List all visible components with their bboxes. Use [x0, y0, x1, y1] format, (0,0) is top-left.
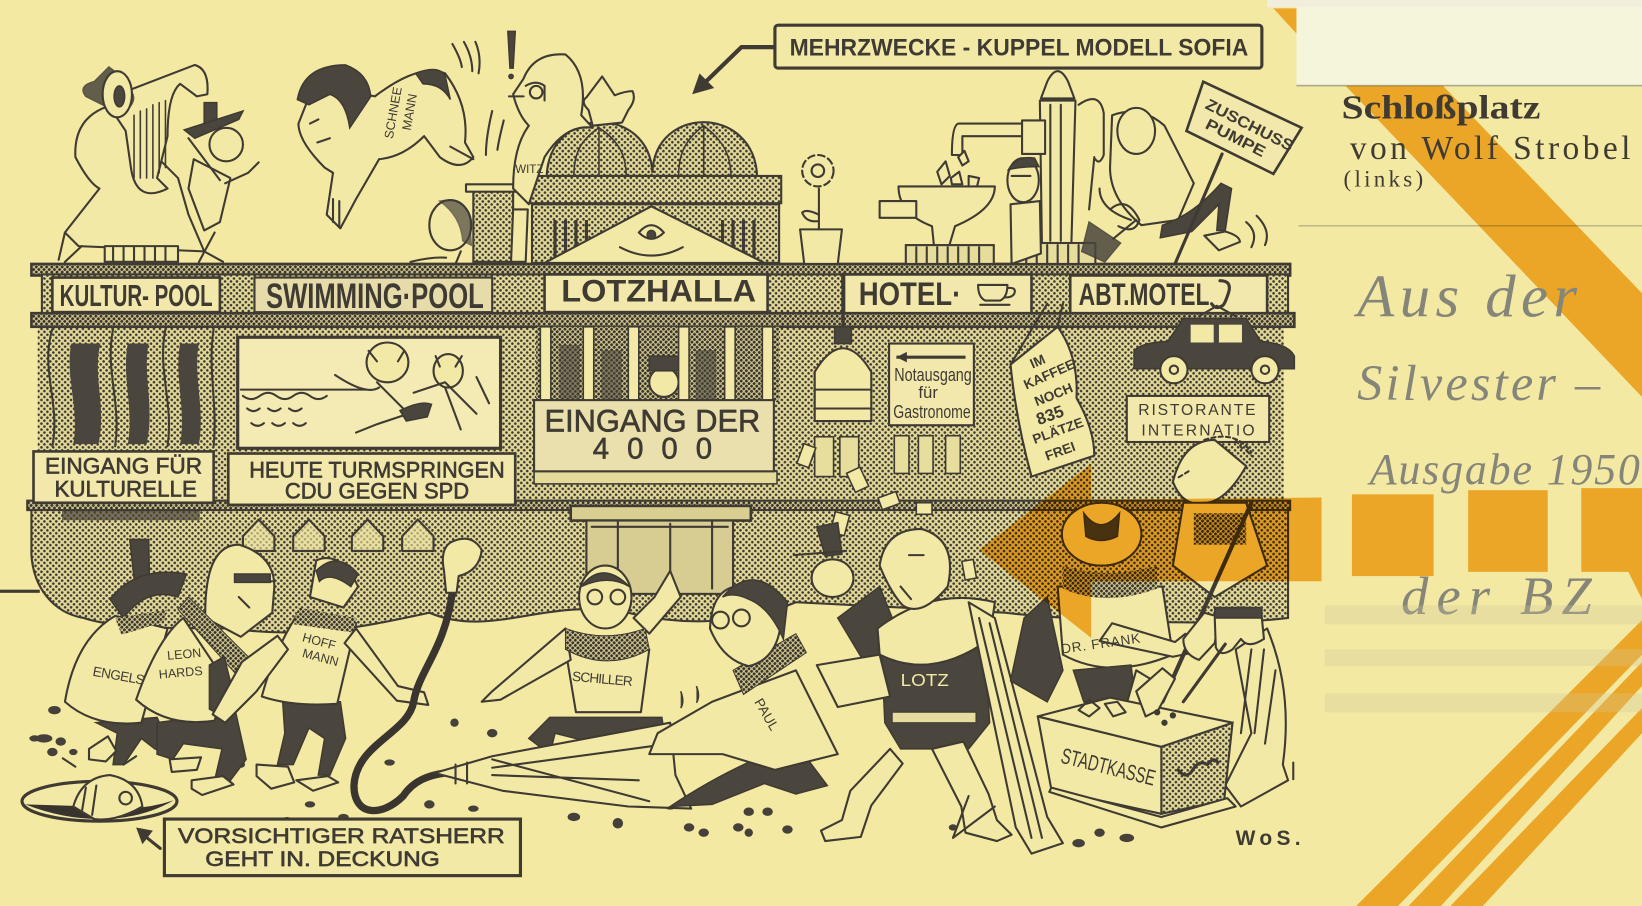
sign: Zuschuss-Pumpe: PUMPE: [1202, 116, 1268, 161]
figure: Dr. Frank: DR. FRANK: [1060, 631, 1141, 657]
swimmer "Schneemann" diving: SCHNEE: [382, 86, 405, 140]
orange corner triangle: [1273, 8, 1296, 34]
sign: Eingang für Kulturelle: [34, 451, 214, 503]
sign: Ristorante Internatio: [1127, 396, 1269, 442]
sign: Lotzhalla: LOTZHALLA: [561, 274, 756, 309]
hose: [354, 539, 482, 811]
sign: Eingang der 4000: [534, 400, 774, 471]
figure: Paul: [649, 580, 838, 770]
car on hook: [1133, 306, 1294, 383]
figure: Hoffmann: MANN: [301, 646, 340, 669]
sign: Eingang der 4000: EINGANG DER: [545, 404, 760, 439]
figure: Dr. Frank: [1011, 503, 1194, 712]
scattered coins: [29, 706, 1134, 847]
figure: Engels: [65, 539, 186, 765]
man with glasses behind pump: [1007, 158, 1041, 264]
domes: [547, 122, 757, 176]
newspaper heading: Schloßplatz: [1341, 89, 1630, 191]
domed roof temple: [530, 122, 781, 263]
sign: Vorsichtiger Ratsherr: VORSICHTIGER RATSHERR: [178, 825, 505, 848]
orange diagonal band: [1346, 86, 1642, 397]
figure: Leonhards: LEON: [167, 646, 202, 663]
handwritten note: Ausgabe 1950: [1367, 445, 1640, 494]
banner: Im Kaffee noch 835 Plätze frei: IM: [1028, 352, 1048, 371]
handwritten note: Silvester –: [1357, 355, 1601, 411]
orange stripes bottom right: [1356, 620, 1642, 906]
sign: Eingang für Kulturelle: KULTURELLE: [54, 476, 197, 501]
chimney with girl: [410, 184, 518, 264]
swimmer "Schneemann" diving: [297, 65, 473, 228]
arrow to manhole: [136, 827, 160, 848]
falling papers: [797, 444, 976, 580]
banner: Im Kaffee noch 835 Plätze frei: 835: [1034, 402, 1066, 429]
arrow to dome: [692, 47, 773, 94]
banner: Im Kaffee noch 835 Plätze frei: PLÄTZE: [1031, 415, 1085, 447]
colonnade with people: [536, 327, 779, 402]
banner: Im Kaffee noch 835 Plätze frei: KAFFEE: [1021, 357, 1077, 392]
sign: Notausgang für Gastronome: [889, 344, 974, 425]
exclamation and motion marks: [452, 31, 515, 155]
water pump: [952, 71, 1104, 264]
sign: Ristorante Internatio: INTERNATIO: [1141, 423, 1255, 440]
base wall: [31, 507, 1288, 633]
sign: Eingang der 4000: 4000: [593, 433, 712, 466]
roof cornice: [27, 264, 1294, 510]
sign: Zuschuss-Pumpe: [1175, 82, 1302, 264]
sign: Mehrzwecke-Kuppel Modell Sofia: MEHRZWECKE - KUPPEL MODELL SOFIA: [790, 35, 1248, 62]
newspaper heading: Schloßplatz: von Wolf Strobel: [1350, 130, 1630, 167]
swimming pool poster: [238, 337, 501, 448]
swimmer "Schneemann" diving: MANN: [400, 93, 420, 131]
sign: Notausgang für Gastronome: für: [918, 383, 938, 402]
figure: Hoffmann: [213, 558, 428, 791]
figure: Lotz: [817, 529, 1012, 841]
manhole with cautious councillor: [22, 756, 177, 821]
man with kettle behind the dome: WITZ: [515, 164, 543, 176]
sign: Kultur-Pool: KULTUR- POOL: [60, 280, 213, 313]
figure kneeling with long nose: [1215, 607, 1293, 806]
chest: Stadtkasse: [1038, 644, 1236, 827]
sign: Abt. Motel: ABT.MOTEL: [1079, 277, 1210, 312]
sign: Heute Turmspringen: HEUTE TURMSPRINGEN: [249, 458, 505, 483]
figure: Paul: PAUL: [751, 696, 782, 734]
figure: Leonhards: HARDS: [158, 664, 203, 682]
figure: Schiller: SCHILLER: [572, 669, 633, 689]
balustrade: [530, 176, 781, 203]
umbrella on the ground: [435, 723, 827, 809]
banner: Im Kaffee noch 835 Plätze frei: NOCH: [1032, 380, 1075, 409]
sign: Eingang für Kulturelle: EINGANG FÜR: [45, 453, 202, 478]
sign: Vorsichtiger Ratsherr: GEHT IN. DECKUNG: [205, 848, 440, 871]
curtained windows: [46, 329, 219, 446]
faded show-through text: [1325, 605, 1642, 712]
fountain bowl with papers: [880, 151, 995, 264]
chest: Stadtkasse: STADTKASSE: [1059, 743, 1158, 791]
banner: Im Kaffee noch 835 Plätze frei: FREI: [1043, 439, 1077, 464]
sign: Heute Turmspringen: [228, 454, 515, 505]
pediment with eye: [545, 206, 764, 263]
figure: Engels: ENGELS: [92, 664, 146, 688]
harp player and violinist: [59, 65, 259, 262]
sign: Zuschuss-Pumpe: ZUSCHUSS: [1202, 96, 1296, 155]
man with shovel: [1122, 437, 1267, 736]
orange dashed arrow: [979, 464, 1642, 638]
sign: Kultur-Pool: [52, 278, 220, 313]
lower hotel windows: [815, 436, 960, 477]
bearded man with hat: [794, 523, 901, 670]
flower in pot: [800, 155, 842, 264]
arched windows of the base: [63, 511, 434, 551]
newspaper heading: Schloßplatz: (links): [1344, 165, 1423, 191]
pasted light paper at top right: [0, 0, 1642, 593]
rolled umbrella: [953, 602, 1063, 854]
figure: Schiller: [482, 566, 681, 754]
artist signature: WoS.: [1236, 827, 1301, 850]
newspaper heading: Schloßplatz: Schloßplatz: [1341, 89, 1541, 126]
figure: Leonhards: [136, 545, 274, 795]
figure: Lotz: LOTZ: [901, 670, 949, 690]
handwritten note: Aus der: [1353, 263, 1577, 330]
sign: Hotel with cup: HOTEL·: [859, 276, 961, 312]
sign: Swimming-Pool: SWIMMING·POOL: [266, 276, 484, 316]
sign: Hotel with cup: [844, 274, 1031, 313]
hotel bell window: [815, 274, 871, 421]
sign: Heute Turmspringen: CDU GEGEN SPD: [285, 479, 469, 504]
handwritten note: der BZ: [1401, 565, 1592, 626]
sign: Vorsichtiger Ratsherr: [164, 819, 520, 876]
sign: Ristorante Internatio: RISTORANTE: [1138, 402, 1256, 419]
handwritten note: [1353, 263, 1640, 626]
entrance cornice: [534, 471, 777, 594]
figure: Hoffmann: HOFF: [301, 630, 338, 653]
man with kettle behind the dome: [509, 54, 634, 262]
sign: Mehrzwecke-Kuppel Modell Sofia: [775, 25, 1262, 68]
banner: Im Kaffee noch 835 Plätze frei: [1011, 304, 1094, 477]
sign: Notausgang für Gastronome: Notausgang: [894, 364, 972, 385]
sign: Notausgang für Gastronome: Gastronome: [893, 401, 971, 422]
upper wall: [38, 314, 1284, 509]
building: [27, 264, 1294, 633]
pumping man with hammer leg: [1082, 108, 1267, 262]
